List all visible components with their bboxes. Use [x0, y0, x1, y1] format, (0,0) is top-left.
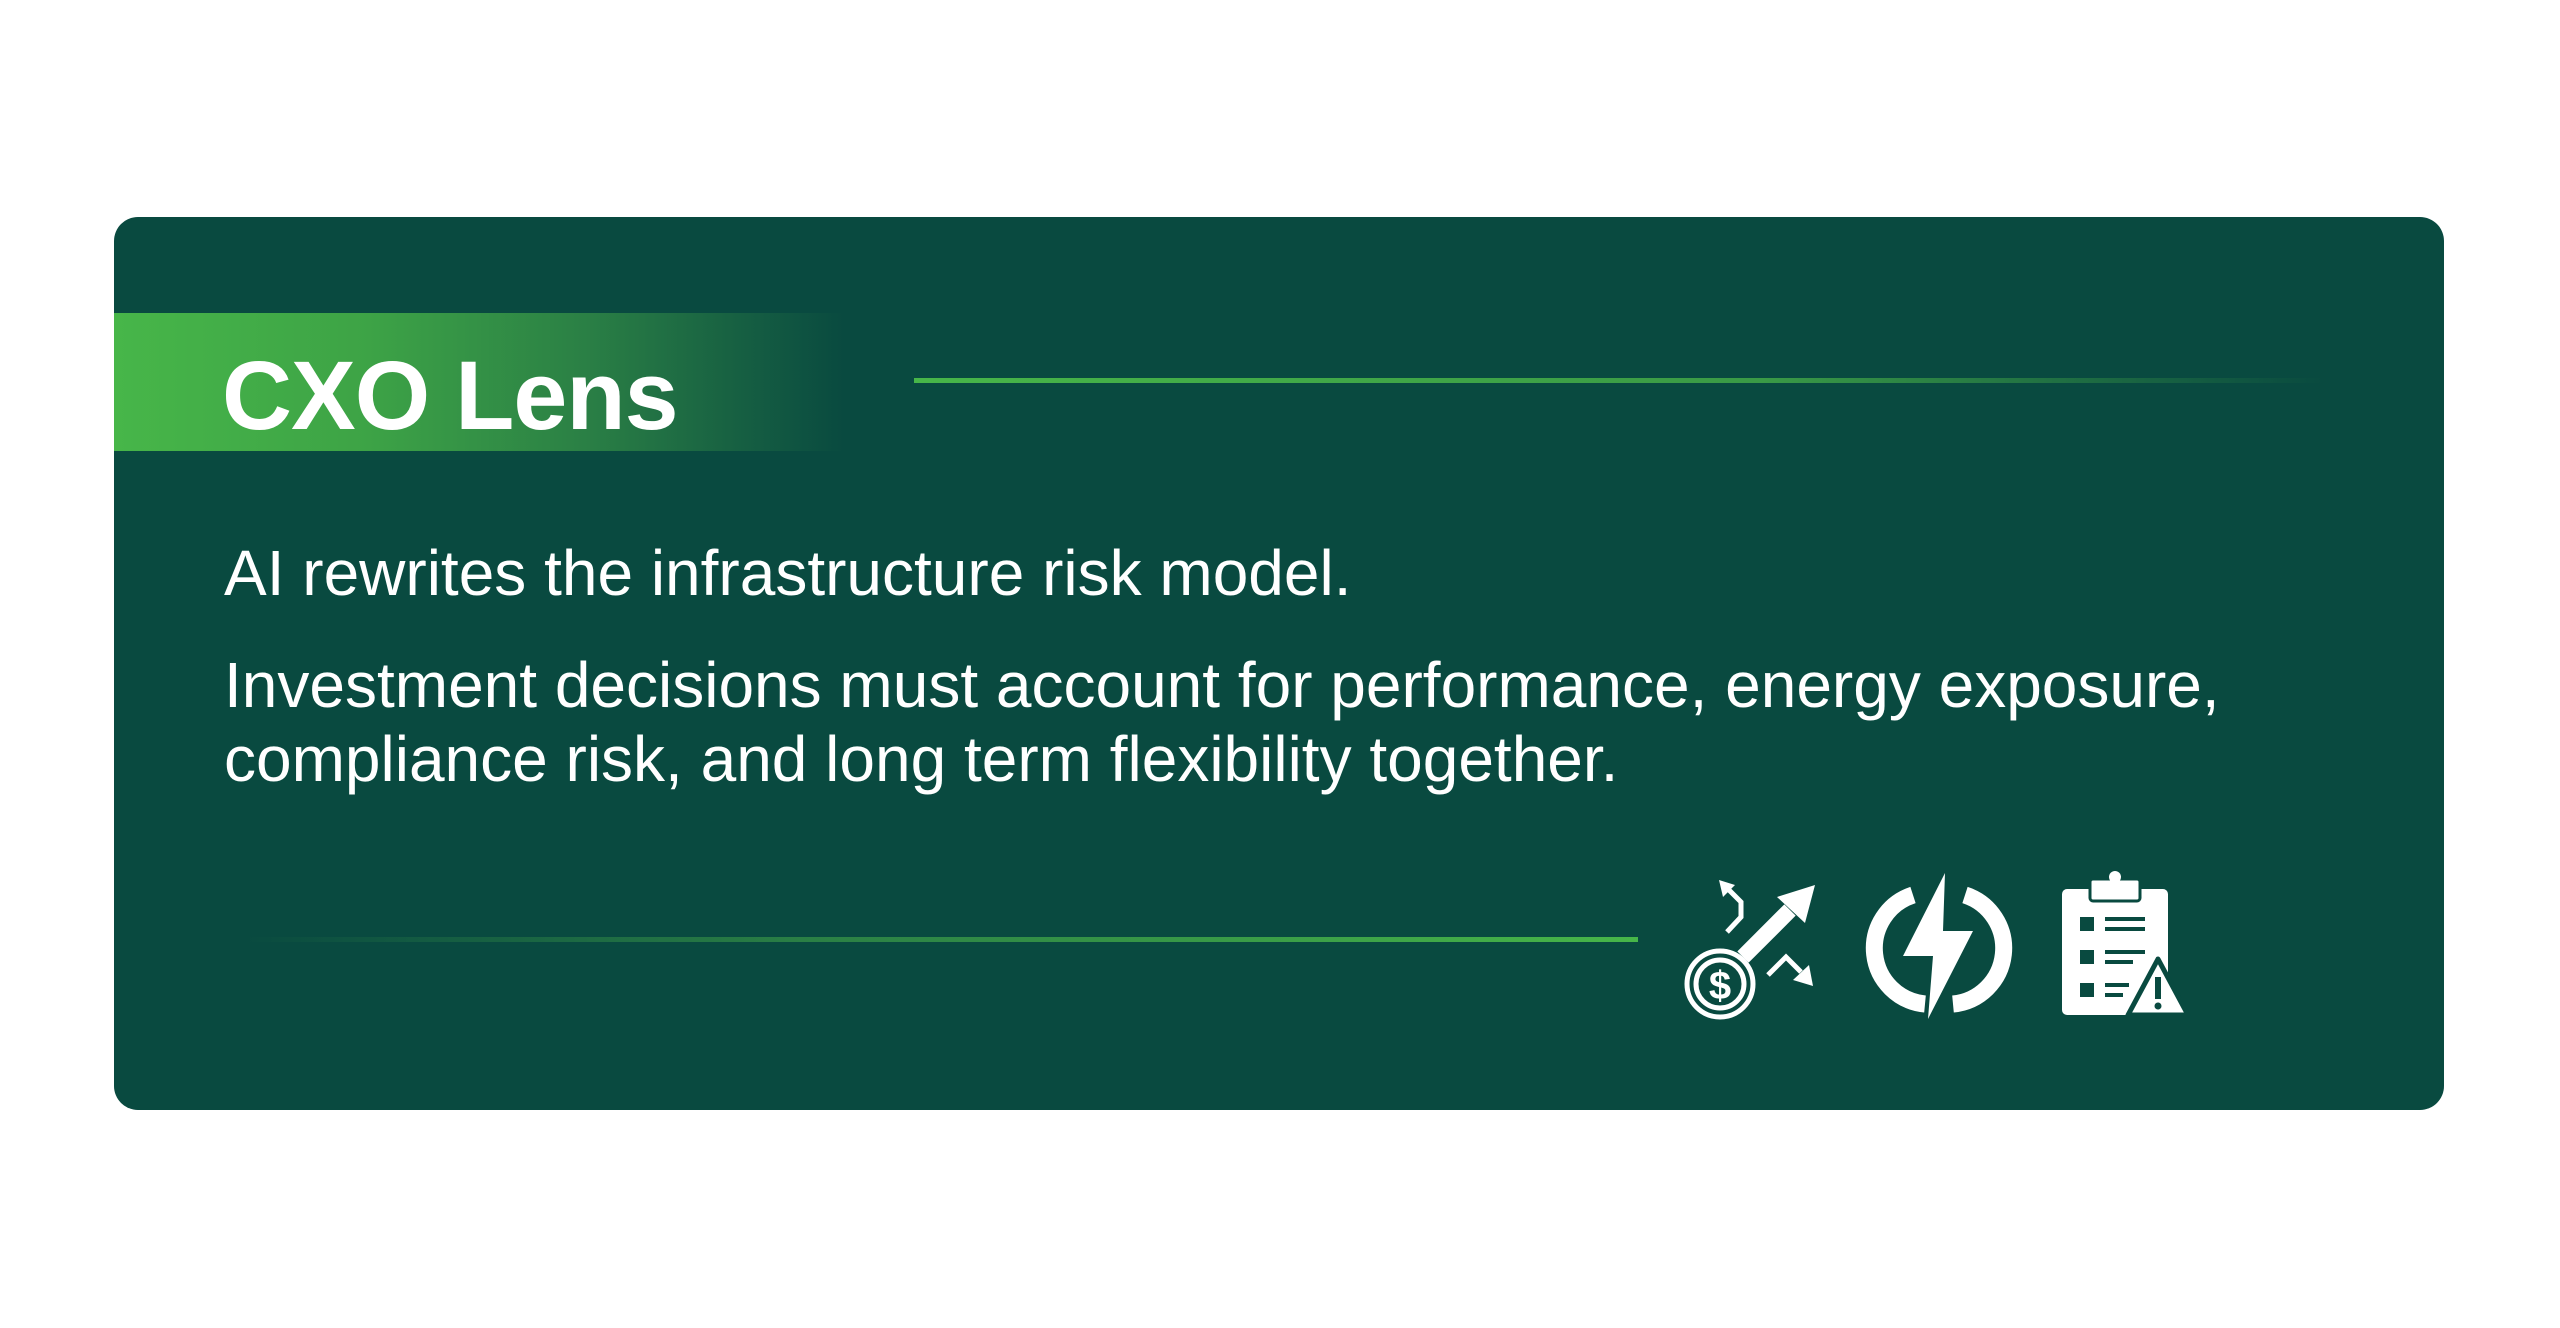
icon: cost and growth: [1684, 880, 1815, 1020]
text: body: Investment decisions must account for performance, energy exposure, compliance risk, and long term flexibility together.: [224, 649, 2220, 795]
text: headline: AI rewrites the infrastructure risk model.: [224, 537, 1351, 609]
icon: cost and growth: $: [1709, 964, 1731, 1008]
title band: [114, 313, 844, 451]
icon: energy: [1866, 873, 2012, 1019]
title: CXO Lens: [222, 341, 678, 450]
icon: compliance checklist warning: [2062, 871, 2184, 1015]
panel: CXO Lens: [114, 217, 2444, 1110]
